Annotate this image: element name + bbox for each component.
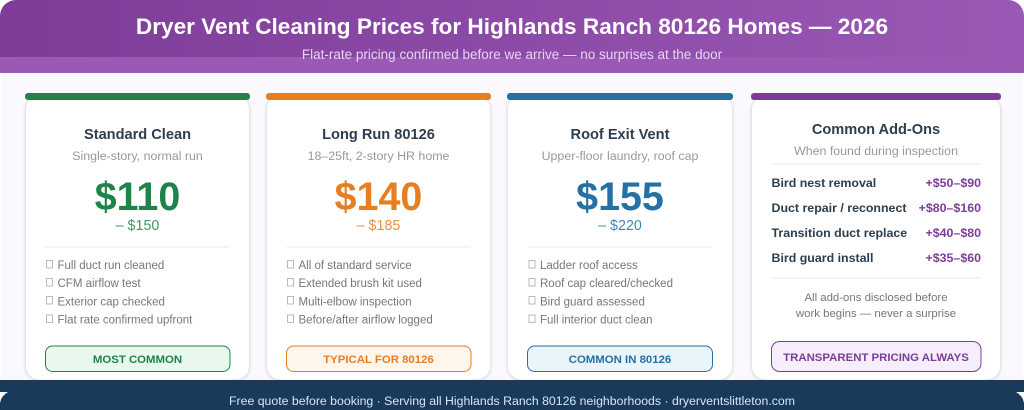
feature list: Before/after airflow logged xyxy=(298,314,433,326)
add-on price rows: Bird guard install xyxy=(772,251,873,265)
feature list: All of standard service xyxy=(298,260,412,272)
card subtitle: When found during inspection xyxy=(794,144,958,158)
badge xyxy=(46,346,230,372)
card title: Common Add-Ons xyxy=(812,122,940,138)
panel: common add-ons xyxy=(751,93,1001,380)
disclosure note: All add-ons disclosed before xyxy=(804,292,948,304)
add-on price rows: +$80–$160 xyxy=(919,201,981,215)
feature list: Exterior cap checked xyxy=(58,296,165,308)
price: $140 xyxy=(335,175,422,219)
feature list: Flat rate confirmed upfront xyxy=(58,314,193,326)
badge xyxy=(286,346,471,372)
panel: long run xyxy=(266,93,491,380)
feature list xyxy=(46,260,193,326)
feature list: Full interior duct clean xyxy=(540,314,652,326)
price: $110 xyxy=(95,175,180,219)
feature list: Full duct run cleaned xyxy=(58,260,164,272)
add-on price rows: +$50–$90 xyxy=(926,176,981,190)
add-on price rows xyxy=(772,176,981,265)
price upper range: – $220 xyxy=(598,218,642,234)
price upper range: – $185 xyxy=(357,218,400,234)
price upper range: – $150 xyxy=(116,218,159,234)
subtitle: Flat-rate pricing confirmed before we arrive — no surprises at the door xyxy=(302,47,723,62)
panel: roof exit vent xyxy=(507,93,733,380)
add-on price rows: Transition duct replace xyxy=(772,226,907,240)
badge: TYPICAL FOR 80126 xyxy=(323,354,434,366)
feature list: CFM airflow test xyxy=(58,278,141,290)
feature list: Ladder roof access xyxy=(540,260,638,272)
price: $155 xyxy=(576,175,664,219)
add-on price rows: +$40–$80 xyxy=(926,226,981,240)
add-on price rows: +$35–$60 xyxy=(926,251,981,265)
panel: standard clean xyxy=(25,93,250,380)
feature list: Extended brush kit used xyxy=(298,278,422,290)
feature list: Roof cap cleared/checked xyxy=(540,278,673,290)
add-on price rows: Duct repair / reconnect xyxy=(772,201,906,215)
feature list: Multi-elbow inspection xyxy=(298,296,412,308)
card title: Roof Exit Vent xyxy=(571,127,670,143)
badge: MOST COMMON xyxy=(93,354,182,366)
feature list xyxy=(529,260,673,326)
card subtitle: Single-story, normal run xyxy=(72,149,203,163)
card subtitle: 18–25ft, 2-story HR home xyxy=(308,149,450,163)
card title: Standard Clean xyxy=(84,127,191,143)
title: Dryer Vent Cleaning Prices for Highlands Ranch 80126 Homes — 2026 xyxy=(136,14,888,39)
disclosure note xyxy=(795,292,956,320)
badge xyxy=(772,342,981,372)
feature list: Bird guard assessed xyxy=(540,296,645,308)
feature list xyxy=(288,260,433,326)
header banner xyxy=(0,0,1024,73)
badge: COMMON IN 80126 xyxy=(569,354,671,366)
disclosure note: work begins — never a surprise xyxy=(795,308,956,320)
footer text: Free quote before booking · Serving all Highlands Ranch 80126 neighborhoods · dryerventslittleton.com xyxy=(229,394,795,408)
card title: Long Run 80126 xyxy=(322,127,435,143)
badge xyxy=(528,346,712,372)
badge: TRANSPARENT PRICING ALWAYS xyxy=(783,352,969,364)
add-on price rows: Bird nest removal xyxy=(772,176,876,190)
card subtitle: Upper-floor laundry, roof cap xyxy=(542,149,699,163)
footer bar xyxy=(0,380,1024,410)
